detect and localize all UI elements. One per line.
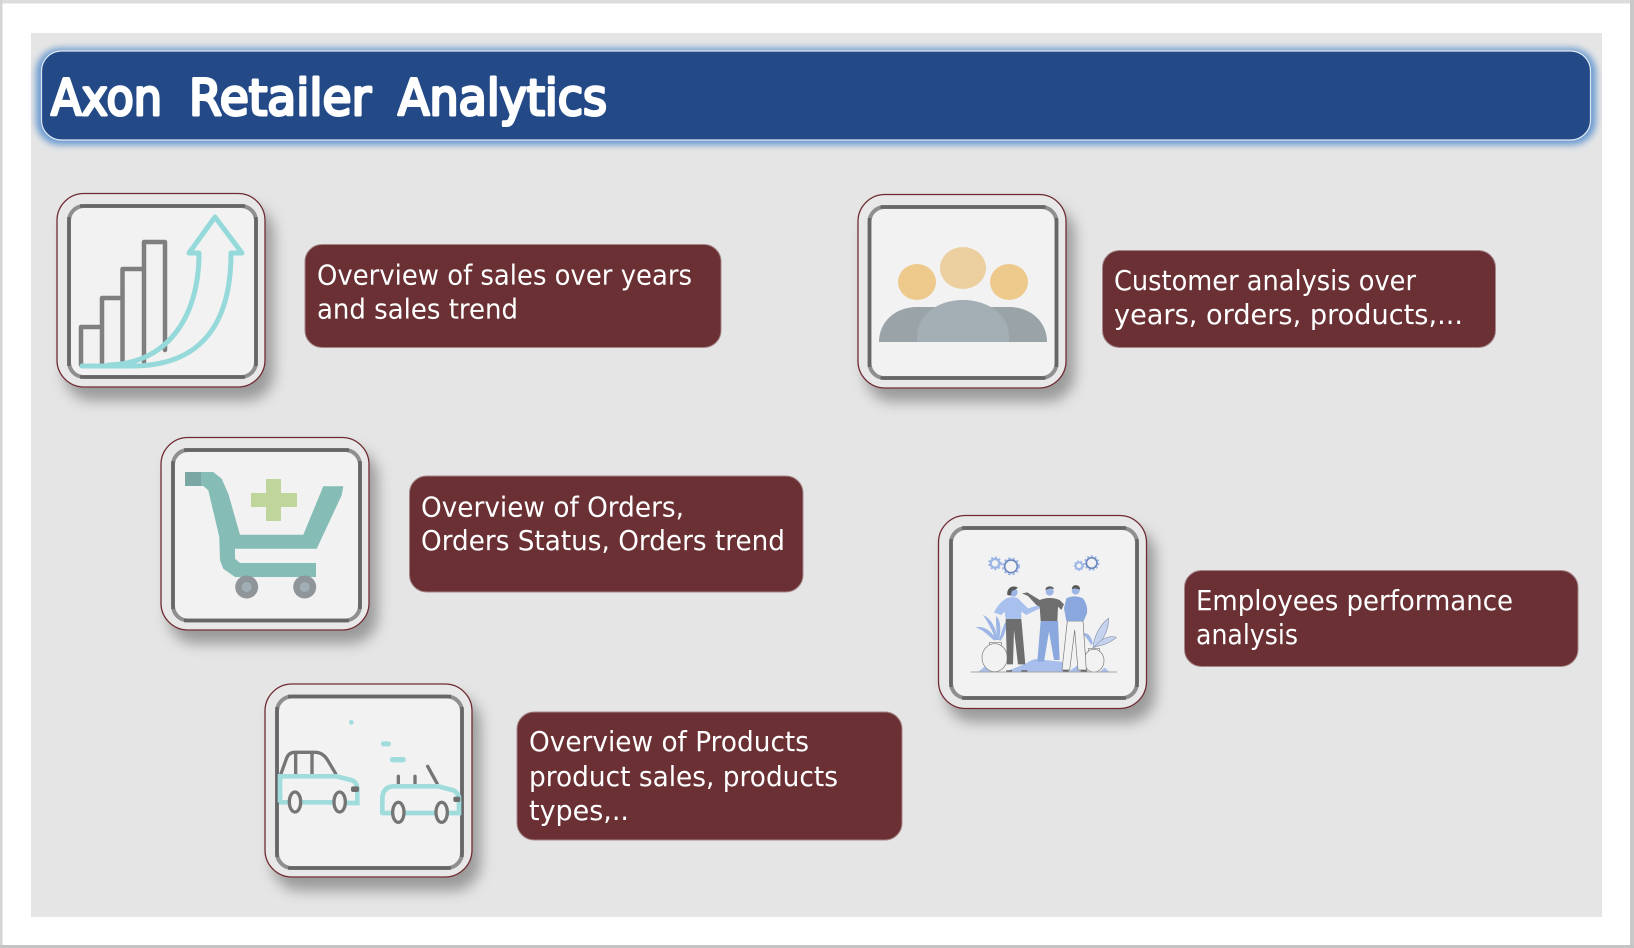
card: employees bbox=[938, 516, 1146, 708]
text box: orders: Orders Status, Orders trend bbox=[421, 525, 785, 557]
icon: three people bbox=[879, 247, 1047, 342]
title: Analytics bbox=[398, 69, 607, 127]
text box: employees: analysis bbox=[1196, 619, 1298, 651]
icon: team of three people bbox=[970, 556, 1117, 672]
text box: products: Overview of Products bbox=[529, 726, 809, 758]
title: Retailer bbox=[189, 69, 371, 127]
title: Axon bbox=[51, 69, 162, 127]
text box: products: product sales, products bbox=[529, 761, 838, 793]
text box: employees: Employees performance bbox=[1196, 585, 1513, 617]
text box: sales: Overview of sales over years bbox=[317, 260, 692, 292]
text box: sales bbox=[305, 244, 721, 348]
text box: employees bbox=[1184, 570, 1578, 666]
card: customers bbox=[858, 194, 1066, 388]
text box: orders: Overview of Orders, bbox=[421, 492, 684, 524]
text box: sales: and sales trend bbox=[317, 294, 518, 326]
text box: customers: Customer analysis over bbox=[1114, 265, 1417, 297]
text box: products bbox=[517, 712, 902, 840]
card: sales bbox=[57, 194, 265, 387]
text box: products: types,.. bbox=[529, 795, 629, 827]
text box: customers: years, orders, products,... bbox=[1114, 299, 1463, 331]
text box: customers bbox=[1102, 250, 1496, 348]
text box: orders bbox=[410, 476, 803, 592]
card: orders bbox=[161, 438, 369, 630]
card: products bbox=[265, 684, 472, 877]
icon: two cars bbox=[279, 720, 460, 822]
icon: bar chart with rising arrow bbox=[81, 217, 242, 366]
title bbox=[51, 69, 607, 127]
header banner bbox=[36, 48, 1596, 145]
icon: shopping cart with plus bbox=[185, 472, 343, 598]
